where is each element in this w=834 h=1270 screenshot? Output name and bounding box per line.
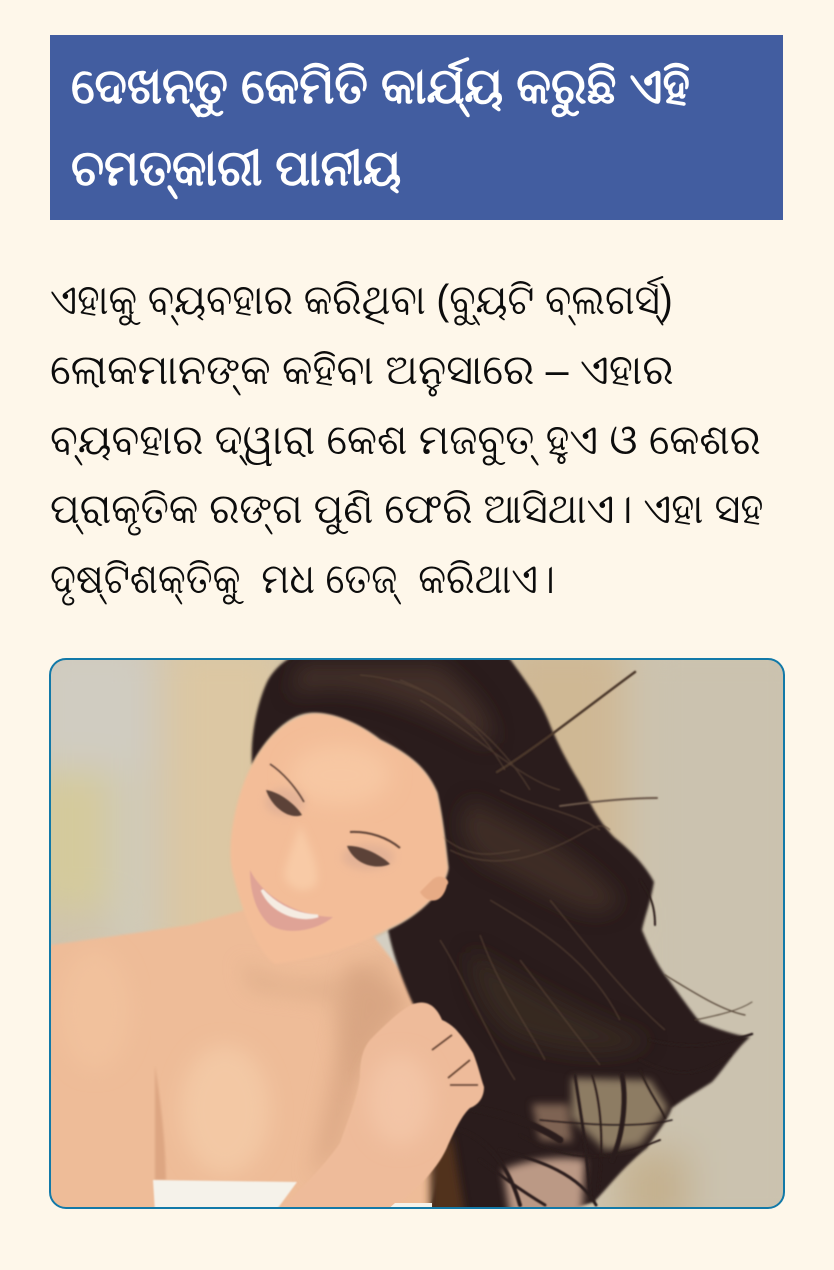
- hair mass: [252, 655, 750, 1212]
- body line 3: ବ୍ୟବହାର ଦ୍ୱାରା କେଶ ମଜବୁତ୍ ହୁଏ ଓ କେଶର: [50, 416, 761, 463]
- photo background: [51, 660, 783, 1207]
- left eyebrow: [270, 764, 304, 802]
- left eye: [266, 790, 302, 816]
- right eyebrow: [350, 832, 400, 848]
- hair highlights: [360, 675, 665, 1080]
- photo border: [50, 659, 784, 1208]
- body line 5: ଦୃଷ୍ଟିଶକ୍ତିକୁ ମଧ ତେଜ୍ କରିଥାଏ।: [50, 555, 555, 602]
- teeth: [262, 890, 318, 918]
- nose: [286, 834, 316, 889]
- photo panel: woman with flowing hair: [49, 658, 785, 1209]
- right eye: [347, 846, 390, 867]
- ear: [420, 877, 448, 901]
- body line 1: ଏହାକୁ ବ୍ୟବହାର କରିଥିବା (ବ୍ୟୁଟି ବ୍ଲଗର୍ସ୍): [50, 276, 673, 323]
- hand and forearm: [324, 1002, 485, 1180]
- white background wedge behind neck: [375, 932, 399, 969]
- face: [230, 713, 448, 964]
- mouth: [250, 870, 333, 931]
- heading line 1: ଦେଖନ୍ତୁ କେମିତି କାର୍ଯ୍ୟ କରୁଛି ଏହି: [71, 58, 690, 114]
- body line 4: ପ୍ରାକୃତିକ ରଙ୍ଗ ପୁଣି ଫେରି ଆସିଥାଏ। ଏହା ସହ: [50, 485, 763, 532]
- see-through gap in hair: [430, 1078, 668, 1215]
- left eye shadow: [265, 788, 305, 816]
- heading panel: [50, 35, 783, 220]
- body line 2: ଲୋକମାନଙ୍କ କହିବା ଅନୁସାରେ – ଏହାର: [50, 346, 674, 393]
- body text: [50, 276, 763, 606]
- finger creases: [432, 1035, 478, 1085]
- towel: [152, 1179, 298, 1207]
- heading line 2: ଚମତ୍କାରୀ ପାନୀୟ: [71, 140, 401, 196]
- towel lower edge right: [390, 1203, 432, 1207]
- forehead highlight: [300, 752, 380, 798]
- hair strands: [496, 670, 754, 1207]
- right eye shadow: [342, 844, 394, 870]
- hair tonal patches: [290, 665, 650, 1053]
- shoulder and chest: [50, 910, 440, 1215]
